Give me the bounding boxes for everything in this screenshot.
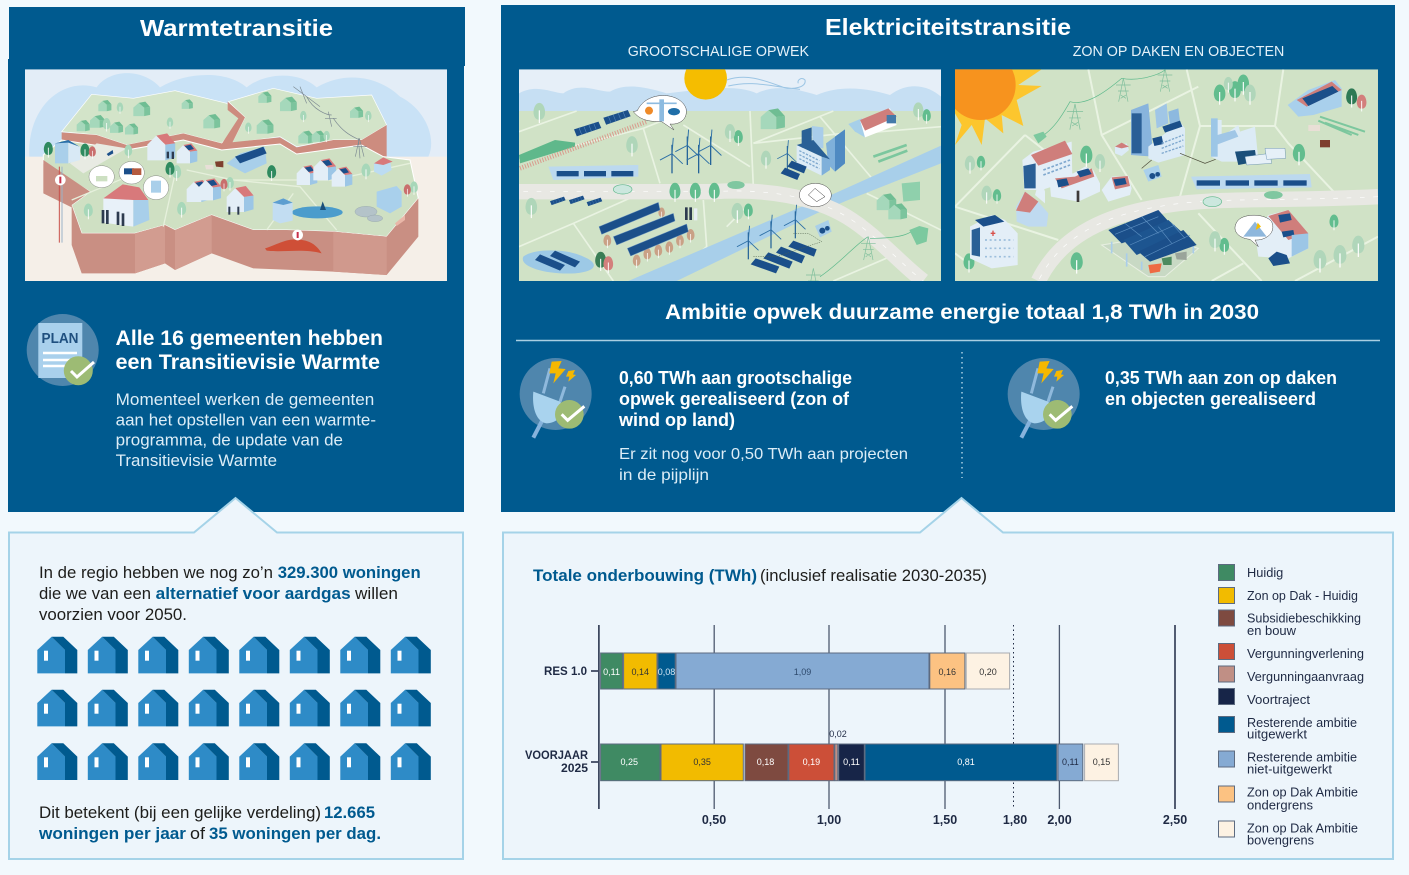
bar value labels: 0,14 (632, 667, 649, 677)
bar value labels: 0,11 (1062, 757, 1079, 767)
bar value labels (603, 667, 1110, 767)
bar value labels: 0,81 (957, 757, 975, 767)
row labels: VOORJAAR (525, 748, 588, 762)
illustration: region map with heat sources (25, 69, 447, 281)
text block: transitievisie: Transitievisie Warmte (116, 452, 277, 470)
panel: elektriciteitstransitie (501, 5, 1395, 512)
text block: grootschalige opwek result: wind op land) (618, 410, 735, 430)
legend: Huidig (1247, 565, 1283, 580)
bar value labels: 0,11 (843, 757, 860, 767)
legend: Resterende ambitie (1247, 715, 1357, 730)
text block: grootschalige opwek result: 0,60 TWh aan grootschalige (619, 368, 852, 388)
subheading: grootschalige opwek: GROOTSCHALIGE OPWEK (628, 43, 809, 60)
bar value labels: 0,11 (603, 667, 620, 677)
text block: grootschalige opwek result: in de pijplijn (619, 467, 709, 484)
bar value labels: 0,35 (693, 757, 711, 767)
icon: plan document with check (27, 314, 99, 386)
row labels: RES 1.0 (544, 664, 587, 678)
x axis labels: 0,50 (702, 813, 726, 827)
legend: ondergrens (1247, 798, 1313, 813)
text block: grootschalige opwek result: opwek gerealiseerd (zon of (619, 389, 850, 409)
bar value labels: 1,09 (794, 667, 811, 677)
bar value labels: 0,16 (939, 667, 956, 677)
text block: transitievisie (116, 327, 383, 470)
text block: remaining homes: die we van een (39, 584, 151, 603)
legend: Voortraject (1247, 692, 1310, 707)
bar value labels: 0,08 (658, 667, 675, 677)
legend: niet-uitgewerkt (1247, 762, 1332, 777)
x axis labels (702, 813, 1187, 827)
text block: transitievisie: programma, de update van de (116, 432, 343, 450)
text block: homes per year: of (190, 824, 205, 843)
legend (1218, 564, 1364, 848)
heading: elektriciteitstransitie: Elektriciteitstransitie (825, 14, 1071, 40)
legend: Zon op Dak Ambitie (1247, 785, 1358, 800)
text block: remaining homes (39, 563, 421, 624)
legend: uitgewerkt (1247, 727, 1307, 742)
row labels: 2025 (561, 761, 588, 775)
legend: en bouw (1247, 623, 1297, 638)
bar value labels: 0,18 (757, 757, 774, 767)
text block: remaining homes: 329.300 woningen (278, 563, 421, 582)
icon grid: houses (37, 637, 431, 780)
bar value labels: 0,15 (1093, 757, 1110, 767)
text block: transitievisie: aan het opstellen van een warmte- (116, 412, 376, 430)
text block: remaining homes: In de regio hebben we nog zo’n (39, 563, 273, 582)
illustration: grootschalige opwek landscape (519, 57, 941, 292)
text block: remaining homes: voorzien voor 2050. (39, 605, 187, 624)
callout: housing (9, 498, 463, 859)
heading: warmtetransitie: Warmtetransitie (140, 15, 333, 41)
text block: homes per year: Dit betekent (bij een gelijke verdeling) (39, 803, 321, 822)
text block: zon op daken result (1105, 368, 1337, 409)
panel: warmtetransitie (8, 7, 465, 512)
callout box chart (503, 498, 1393, 859)
chart title: Totale onderbouwing (TWh) (533, 566, 757, 585)
bar: RES 1.0 (601, 653, 1010, 689)
callout box housing (9, 498, 463, 859)
stacked bar chart (525, 625, 1187, 827)
text block: homes per year: 12.665 (324, 803, 375, 822)
subheading: zon op daken: ZON OP DAKEN EN OBJECTEN (1073, 43, 1284, 60)
text block: homes per year: woningen per jaar (38, 824, 186, 843)
row labels (525, 664, 588, 775)
chart title: (inclusief realisatie 2030-2035) (760, 566, 987, 585)
headline: ambition total: Ambitie opwek duurzame energie totaal 1,8 TWh in 2030 (665, 301, 1259, 324)
legend: Zon op Dak Ambitie (1247, 821, 1358, 836)
text block: zon op daken result: en objecten gerealiseerd (1105, 389, 1316, 409)
callout: total substantiation chart (503, 498, 1393, 859)
x axis labels: 1,00 (817, 813, 841, 827)
bar: voorjaar 2025 (601, 744, 1118, 781)
text block: grootschalige opwek result (618, 368, 908, 484)
chart title (533, 566, 987, 585)
text block: zon op daken result: 0,35 TWh aan zon op daken (1105, 368, 1337, 388)
bar value labels: 0,20 (979, 667, 997, 677)
legend: Subsidiebeschikking (1247, 611, 1361, 626)
text block: homes per year (38, 803, 381, 843)
legend: bovengrens (1247, 833, 1314, 848)
legend: Zon op Dak - Huidig (1247, 588, 1358, 603)
legend: Resterende ambitie (1247, 750, 1357, 765)
legend: Vergunningverlening (1247, 646, 1364, 661)
bar value labels: 0,19 (803, 757, 820, 767)
panel background heat (8, 7, 465, 512)
text block: remaining homes: alternatief voor aardgas (156, 584, 351, 603)
icon: plug with check (rooftop) (1008, 358, 1080, 438)
x axis labels: 2,50 (1163, 813, 1187, 827)
icon: plug with check (large scale) (520, 358, 592, 438)
text block: grootschalige opwek result: Er zit nog voor 0,50 TWh aan projecten (619, 446, 908, 463)
text block: transitievisie: Alle 16 gemeenten hebben (116, 327, 383, 350)
text block: transitievisie: Momenteel werken de gemeenten (116, 391, 374, 409)
text block: remaining homes: willen (354, 584, 398, 603)
panel background electricity (501, 5, 1395, 512)
x axis labels: 1,50 (933, 813, 957, 827)
x axis labels: 1,80 (1003, 813, 1027, 827)
text block: homes per year: 35 woningen per dag. (209, 824, 381, 843)
bar value labels: 0,25 (621, 757, 638, 767)
illustration: zon op daken landscape (955, 69, 1378, 281)
icon: plan document with check: PLAN (42, 330, 78, 347)
x axis labels: 2,00 (1047, 813, 1072, 827)
text block: transitievisie: een Transitievisie Warmte (116, 351, 380, 374)
bar value labels: 0,02 (829, 729, 847, 739)
legend: Vergunningaanvraag (1247, 669, 1364, 684)
